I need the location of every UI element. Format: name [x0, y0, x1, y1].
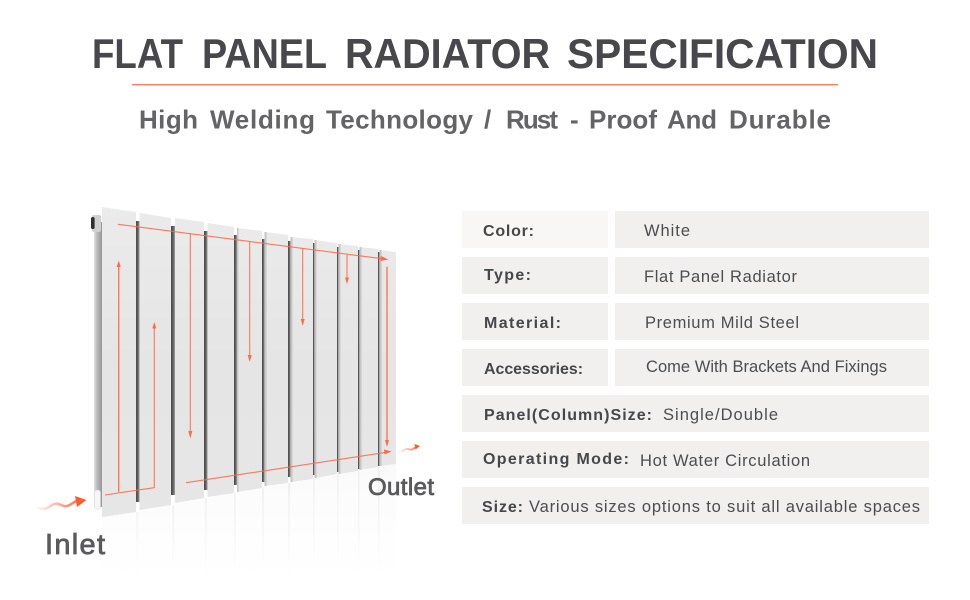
- subtitle: [139, 104, 831, 134]
- arrow: down flow, fifth panel: [248, 242, 252, 362]
- subtitle: Technology: [326, 104, 474, 134]
- radiator panels: [102, 207, 396, 517]
- subtitle: Durable: [729, 104, 831, 134]
- title: RADIATOR: [345, 30, 550, 77]
- title: SPECIFICATION: [567, 30, 878, 77]
- title: FLAT: [92, 30, 183, 77]
- panel gaps: [136, 221, 380, 502]
- subtitle: High: [139, 104, 198, 134]
- arrow: top flow line: [118, 224, 388, 261]
- title underline: [132, 84, 838, 85]
- title: [92, 30, 878, 77]
- subtitle: And: [667, 104, 717, 134]
- spec row: accessories: Come With Brackets And Fixings: [646, 358, 887, 376]
- spec row: size: Various sizes options to suit all available spaces: [529, 498, 920, 516]
- rear body and valves: [91, 215, 102, 509]
- spec row: operating mode: [462, 441, 929, 478]
- spec row: type: [462, 257, 929, 294]
- spec row: type: Flat Panel Radiator: [644, 268, 798, 286]
- spec row: color: [462, 211, 929, 248]
- panel reflections: [102, 464, 396, 580]
- panel left-edge shading: [237, 228, 382, 492]
- spec row: accessories: Accessories:: [484, 361, 583, 378]
- spec row: color: Color:: [483, 223, 534, 240]
- arrow: down flow, third panel: [188, 233, 192, 438]
- spec row: operating mode: Hot Water Circulation: [640, 452, 810, 470]
- subtitle: Proof: [589, 104, 657, 134]
- subtitle: /: [484, 104, 491, 134]
- spec row: size: Size:: [482, 499, 523, 516]
- spec row: panel size: Panel(Column)Size:: [484, 407, 652, 424]
- inlet label: Inlet: [45, 529, 105, 561]
- spec row: panel size: Single/Double: [663, 406, 778, 424]
- outlet label: Outlet: [368, 474, 434, 501]
- spec row: material: Material:: [484, 315, 561, 332]
- subtitle: Welding: [210, 104, 315, 134]
- spec row: panel size: [462, 395, 929, 432]
- arrow: down flow, ninth panel: [345, 255, 349, 284]
- arrow: inlet flow up, first panel: [117, 260, 121, 492]
- icon: inlet heat arrow: [35, 496, 86, 509]
- subtitle: Rust: [506, 104, 558, 134]
- spec row: type: Type:: [484, 267, 531, 284]
- radiator illustration: [91, 207, 396, 580]
- arrow: bottom flow line: [186, 450, 392, 483]
- subtitle: -: [570, 104, 579, 134]
- arrow: inlet flow up, second panel: [105, 322, 156, 495]
- arrow: down flow, last panel: [385, 267, 389, 447]
- spec row: material: Premium Mild Steel: [645, 314, 799, 332]
- spec row: material: [462, 303, 929, 340]
- reflection edges: [136, 467, 380, 577]
- spec row: accessories: [462, 349, 929, 386]
- spec row: size: [462, 487, 929, 524]
- arrow: down flow, seventh panel: [301, 248, 305, 326]
- spec row: color: White: [644, 222, 690, 240]
- spec row: operating mode: Operating Mode:: [483, 451, 629, 468]
- icon: outlet heat arrow: [398, 444, 420, 452]
- title: PANEL: [202, 30, 327, 77]
